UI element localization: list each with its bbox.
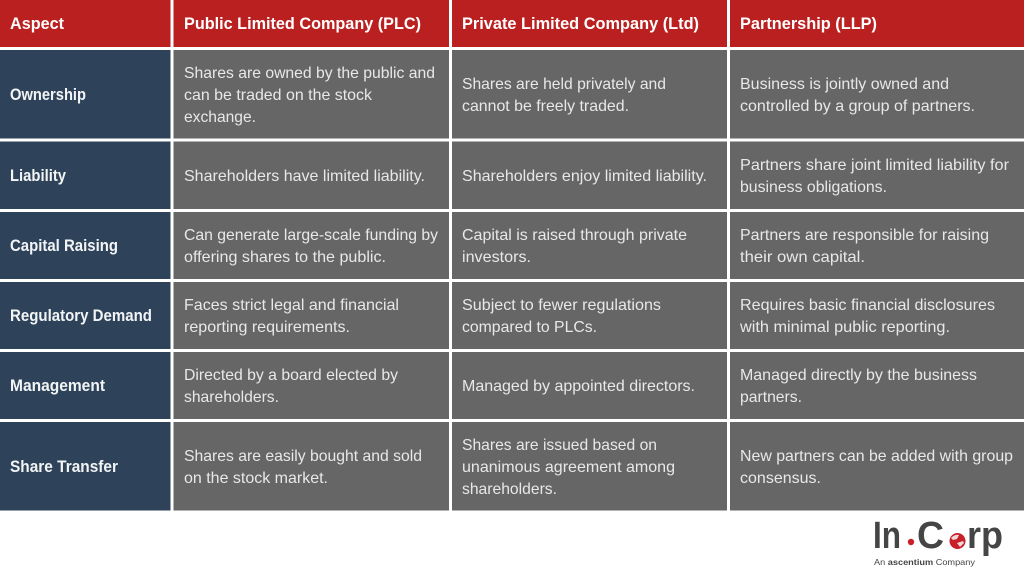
row: Share Transfer: unanimous agreement among	[462, 459, 675, 476]
row: Ownership: controlled by a group of partners.	[740, 98, 975, 115]
row: Share Transfer: consensus.	[740, 470, 821, 487]
row: Capital Raising	[0, 212, 1024, 279]
row: Capital Raising: offering shares to the public.	[184, 249, 386, 266]
logo: In.Corp: rp	[967, 515, 1003, 557]
row: Capital Raising: Can generate large-scale funding by	[184, 227, 438, 244]
row: Regulatory Demand: Subject to fewer regulations	[462, 297, 661, 314]
row: Liability: Shareholders enjoy limited liability.	[462, 168, 707, 185]
row: Share Transfer: Shares are easily bought and sold	[184, 448, 422, 465]
header row: Public Limited Company (PLC)	[184, 14, 421, 33]
logo: In.Corp	[873, 515, 1003, 567]
row: Share Transfer: on the stock market.	[184, 470, 328, 487]
row: Regulatory Demand: Requires basic financial disclosures	[740, 297, 995, 314]
row: Capital Raising: Partners are responsible for raising	[740, 227, 989, 244]
header row: Aspect	[10, 14, 64, 33]
logo: In.Corp: C	[917, 515, 944, 557]
row: Regulatory Demand: with minimal public reporting.	[739, 319, 950, 336]
row: Ownership: Shares are held privately and	[462, 76, 666, 93]
row: Ownership: exchange.	[184, 109, 256, 126]
row: Capital Raising: Capital Raising	[10, 237, 118, 255]
row: Liability: Shareholders have limited liability.	[184, 168, 425, 185]
row: Management: Management	[10, 377, 105, 395]
row: Ownership: can be traded on the stock	[184, 87, 373, 104]
logo: In.Corp: An ascentium Company	[874, 557, 976, 567]
header row	[0, 0, 1024, 47]
row: Liability: Partners share joint limited liability for	[740, 157, 1010, 174]
header row: Partnership (LLP)	[740, 14, 877, 33]
row: Regulatory Demand: Faces strict legal and financial	[184, 297, 399, 314]
row: Regulatory Demand: Regulatory Demand	[10, 307, 152, 325]
row: Ownership: Ownership	[10, 86, 86, 104]
row: Share Transfer	[0, 422, 1024, 510]
row: Management	[0, 352, 1024, 419]
row: Liability: business obligations.	[740, 179, 887, 196]
row: Capital Raising: Capital is raised through private	[462, 227, 687, 244]
row: Ownership: Shares are owned by the public and	[184, 65, 435, 82]
logo: In.Corp: In	[873, 515, 901, 557]
row: Regulatory Demand	[0, 282, 1024, 349]
row: Ownership	[0, 50, 1024, 138]
row: Liability	[0, 142, 1024, 209]
row: Liability: Liability	[10, 167, 67, 185]
row: Ownership: cannot be freely traded.	[462, 98, 629, 115]
row: Capital Raising: investors.	[462, 249, 531, 266]
row: Management: shareholders.	[184, 389, 279, 406]
row: Regulatory Demand: compared to PLCs.	[462, 319, 597, 336]
row: Share Transfer: Shares are issued based on	[462, 437, 657, 454]
row: Management: Managed directly by the business	[740, 367, 977, 384]
row: Management: Managed by appointed directors.	[462, 378, 695, 395]
row: Share Transfer: Share Transfer	[10, 458, 119, 476]
row: Ownership: Business is jointly owned and	[740, 76, 949, 93]
row: Capital Raising: their own capital.	[740, 249, 865, 266]
row: Regulatory Demand: reporting requirements.	[184, 319, 350, 336]
row: Share Transfer: New partners can be added with group	[740, 448, 1013, 465]
header row: Private Limited Company (Ltd)	[462, 14, 699, 33]
row: Management: Directed by a board elected by	[184, 367, 398, 384]
row: Management: partners.	[740, 389, 802, 406]
icon: globe	[950, 533, 966, 549]
row: Share Transfer: shareholders.	[462, 481, 557, 498]
